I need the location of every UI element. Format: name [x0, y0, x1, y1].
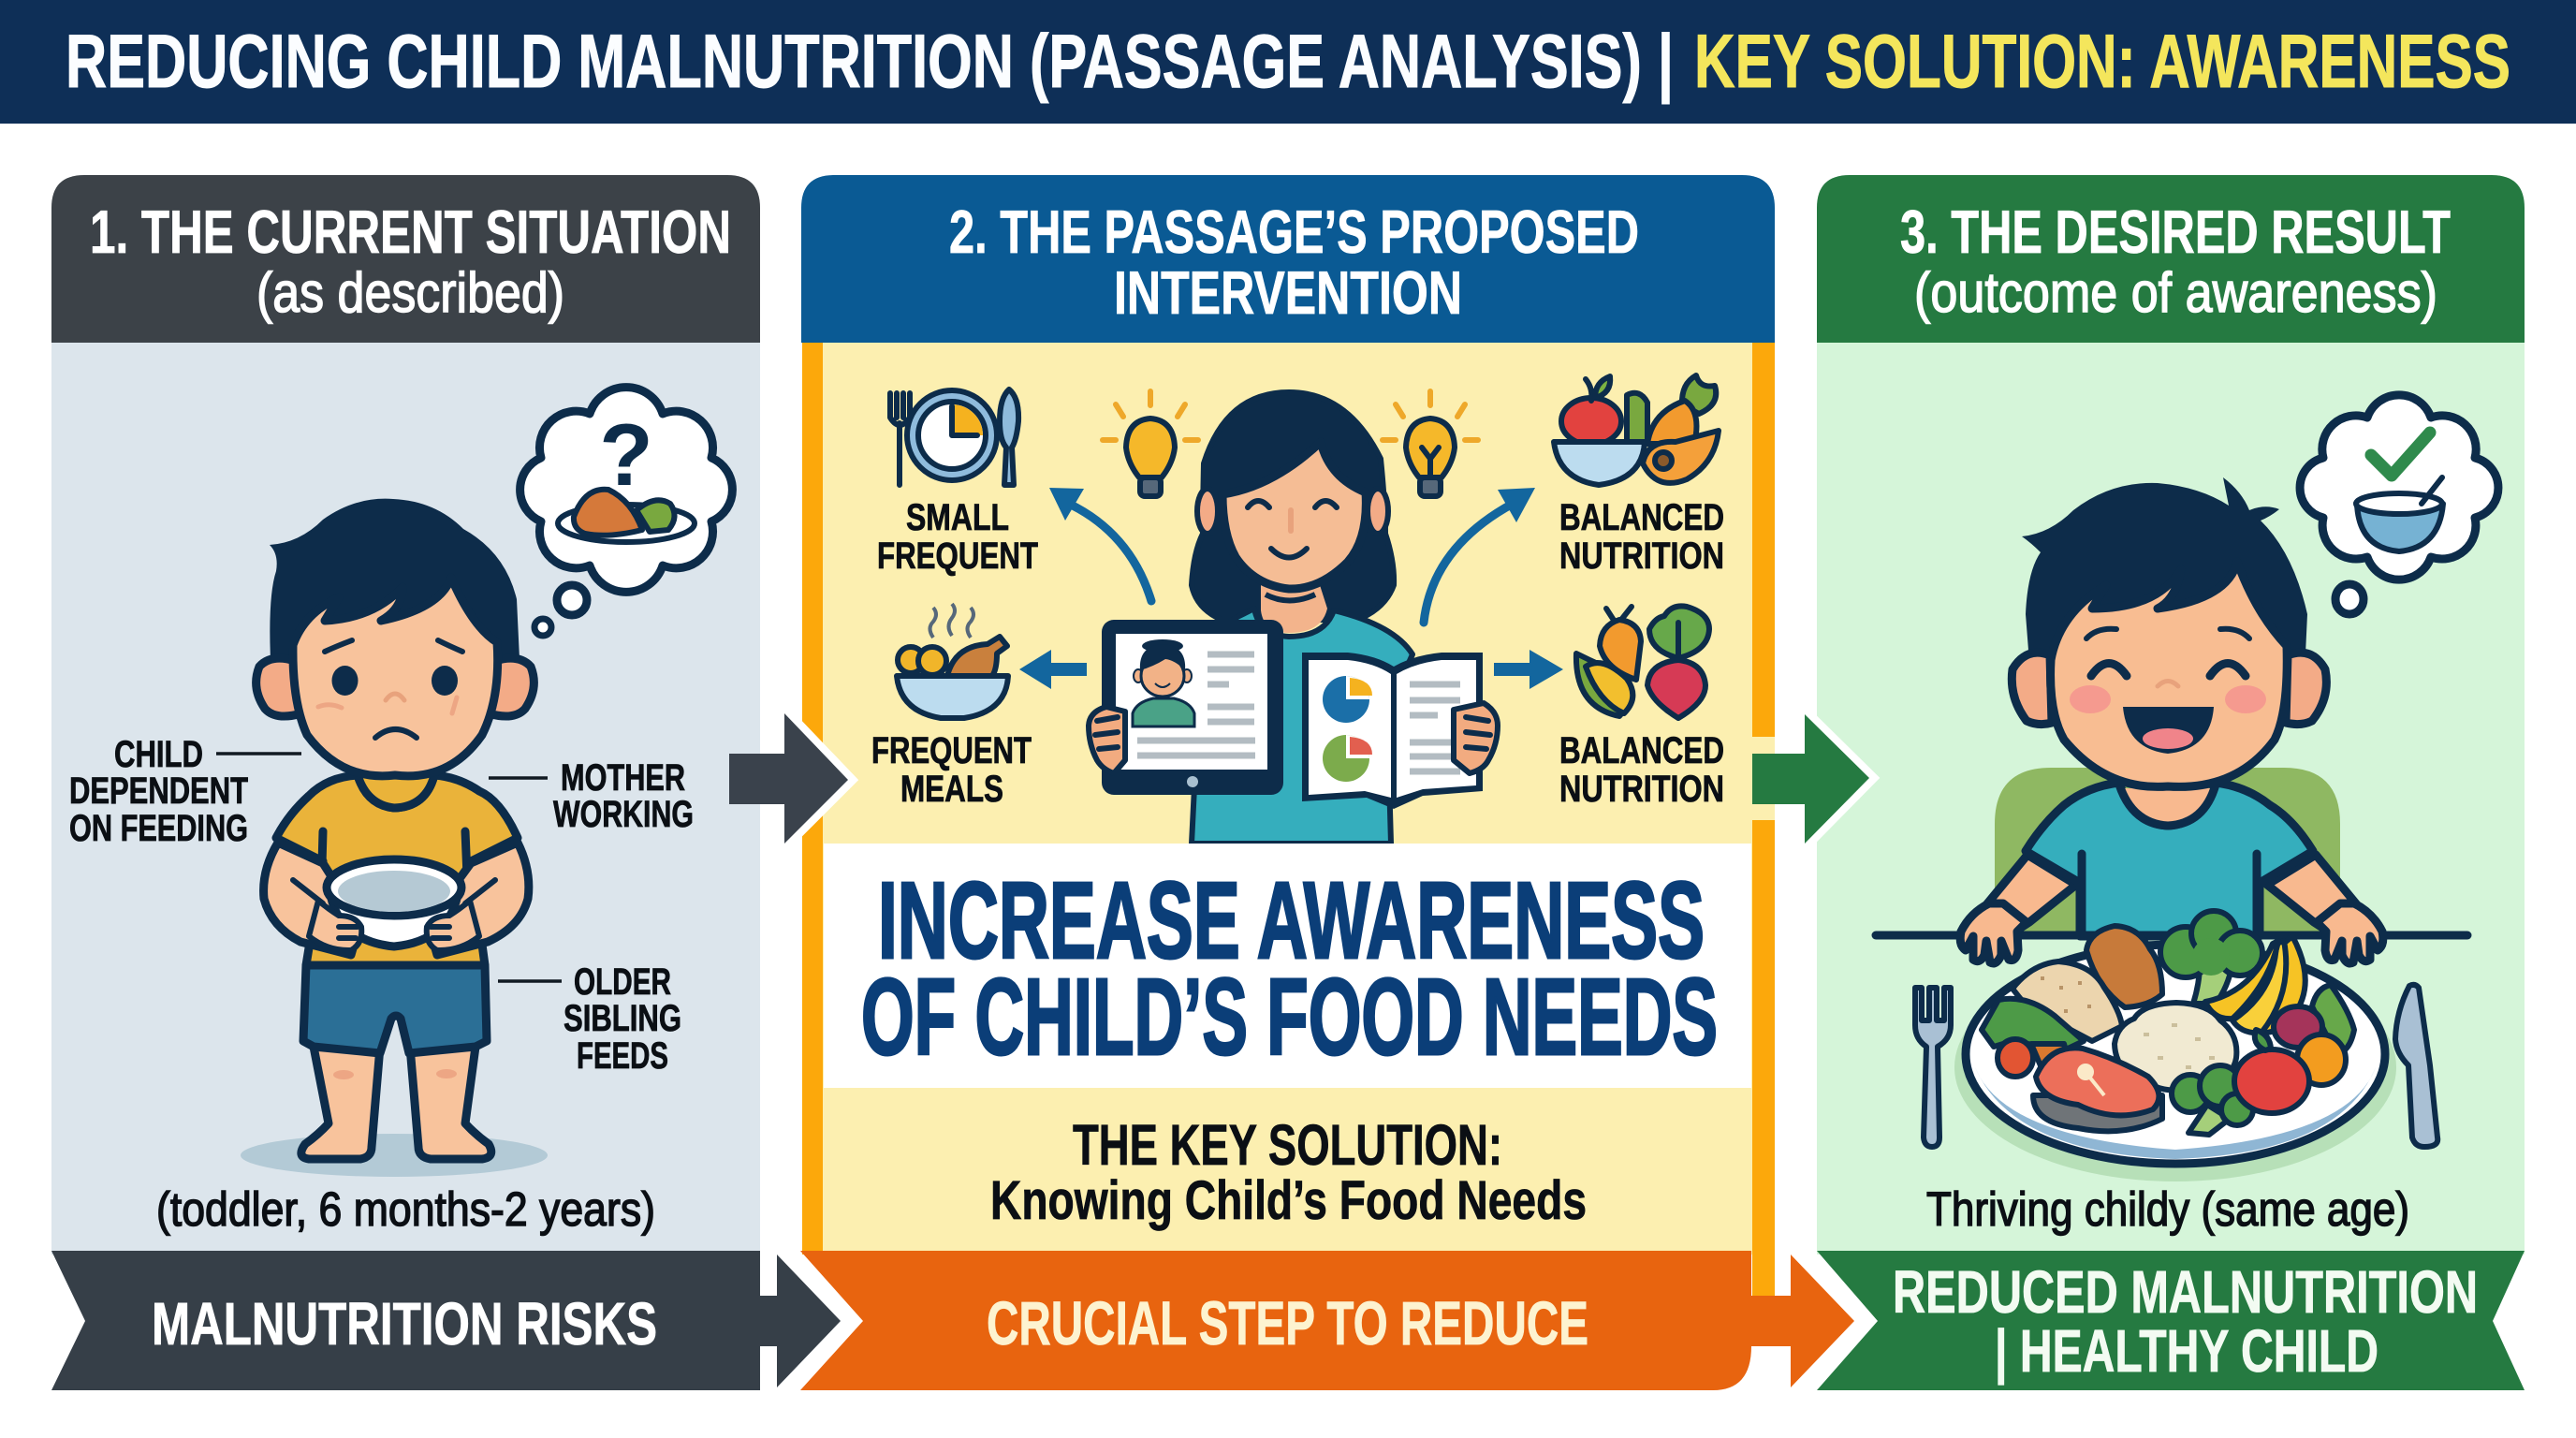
thought bubble: unknown food: [520, 388, 732, 636]
label: child dependent on feeding: [69, 734, 301, 849]
icon: fruit and vegetable bowl: [1554, 375, 1719, 485]
callout: increase awareness: OF CHILD’S FOOD NEEDS: [861, 956, 1718, 1078]
ribbon: reduced malnutrition: [1817, 1251, 2525, 1390]
callout: increase awareness: [824, 844, 1751, 1088]
callout: increase awareness: INCREASE AWARENESS: [878, 859, 1705, 981]
panel 3 heading: [1817, 175, 2525, 343]
label: small frequent: FREQUENT: [877, 536, 1038, 577]
key solution text: Knowing Child’s Food Needs: [990, 1170, 1587, 1231]
label: child dependent on feeding: ON FEEDING: [69, 808, 248, 849]
woman with tablet and book: [1089, 392, 1498, 844]
panel 1 heading: 1. THE CURRENT SITUATION: [90, 198, 731, 266]
panel: desired result: [1817, 175, 2525, 1390]
label: child dependent on feeding: CHILD: [114, 734, 203, 775]
key solution text: THE KEY SOLUTION:: [1073, 1113, 1502, 1177]
icon: frequent meals bowl: [897, 604, 1008, 718]
hand holding tablet: [1089, 707, 1125, 773]
header banner: [0, 0, 2576, 124]
arrow: situation to intervention lower: [760, 1255, 841, 1387]
ribbon: crucial step: CRUCIAL STEP TO REDUCE: [987, 1288, 1588, 1357]
icon: left lightbulb: [1103, 391, 1198, 496]
label: mother working: WORKING: [553, 794, 694, 835]
ribbon: crucial step: [800, 1251, 1854, 1390]
label: small frequent: [877, 497, 1038, 577]
ribbon: malnutrition risks: [51, 1251, 760, 1390]
key solution text: [990, 1113, 1587, 1231]
panel 1 heading: [51, 175, 760, 343]
label: older sibling feeds: FEEDS: [577, 1035, 668, 1077]
orange: [2297, 1034, 2346, 1085]
panel 2 heading: INTERVENTION: [1114, 258, 1462, 327]
grilled potato: [2086, 926, 2162, 1007]
child: undernourished toddler: [241, 499, 548, 1177]
label: small frequent: SMALL: [906, 497, 1009, 538]
knife: [2395, 985, 2437, 1147]
label: child dependent on feeding: DEPENDENT: [69, 770, 248, 812]
label: balanced nutrition lower: NUTRITION: [1559, 769, 1724, 810]
label: older sibling feeds: [498, 961, 681, 1077]
icon: right lightbulb: [1383, 391, 1478, 496]
panel 1 heading: (as described): [256, 261, 564, 324]
caption: toddler age: (toddler, 6 months-2 years): [156, 1182, 655, 1236]
left hand on table: [1960, 903, 2027, 963]
arrow: situation to intervention upper: [729, 713, 848, 844]
bananas: [2205, 936, 2305, 1033]
label: frequent meals: FREQUENT: [871, 730, 1032, 771]
label: mother working: MOTHER: [561, 757, 685, 799]
label: older sibling feeds: SIBLING: [564, 998, 681, 1039]
ribbon: reduced malnutrition: | HEALTHY CHILD: [1995, 1317, 2378, 1386]
label: frequent meals: MEALS: [900, 769, 1003, 810]
salmon steak: [2033, 1048, 2162, 1131]
panel: current situation: [51, 175, 760, 1390]
caption: thriving child: Thriving childy (same age): [1926, 1182, 2409, 1236]
second broccoli: [2172, 1065, 2253, 1135]
greens and tomato: [1982, 999, 2084, 1050]
hand holding book: [1454, 703, 1498, 773]
healthy meal plate: [1954, 911, 2396, 1181]
leaves right: [2312, 985, 2354, 1053]
label: older sibling feeds: OLDER: [574, 961, 671, 1003]
arrow: intervention to result upper: [1752, 714, 1869, 844]
panel 3 heading: (outcome of awareness): [1914, 261, 2437, 324]
thought bubble: healthy bowl: [2300, 395, 2498, 614]
plum: [2274, 1006, 2322, 1048]
rice mound: [2115, 1003, 2236, 1091]
arrow: to balanced nutrition: [1424, 488, 1535, 623]
label: balanced nutrition lower: BALANCED: [1559, 730, 1724, 771]
apple: [2234, 1049, 2309, 1113]
label: balanced nutrition upper: BALANCED: [1559, 497, 1724, 538]
icon: small frequent plate and clock: [890, 389, 1018, 485]
label: mother working: [489, 757, 694, 835]
broccoli: [2160, 911, 2262, 1004]
thought bubble: unknown food: ?: [599, 405, 653, 504]
title: REDUCING CHILD MALNUTRITION (PASSAGE ANALYSIS) |: [66, 20, 1674, 105]
arrow: to small frequent: [1049, 488, 1151, 601]
label: balanced nutrition lower: [1559, 730, 1724, 810]
child: thriving toddler: [1980, 477, 2364, 936]
fork: [1915, 988, 1951, 1147]
icon: vegetables: [1576, 606, 1709, 718]
arrow: to balanced nutrition lower: [1494, 650, 1563, 689]
open book: [1302, 653, 1483, 809]
ribbon: malnutrition risks: MALNUTRITION RISKS: [152, 1290, 657, 1357]
table edge: [1876, 931, 2467, 940]
label: frequent meals: [871, 730, 1032, 810]
tablet: [1102, 620, 1283, 795]
label: balanced nutrition upper: NUTRITION: [1559, 536, 1724, 577]
label: balanced nutrition upper: [1559, 497, 1724, 577]
right hand on table: [2317, 903, 2383, 963]
panel: proposed intervention: [800, 175, 1854, 1390]
arrow: to frequent meals: [1019, 650, 1087, 689]
panel 2 heading: 2. THE PASSAGE’S PROPOSED: [949, 198, 1639, 266]
bread: [2012, 961, 2122, 1041]
panel 2 heading: [801, 175, 1775, 343]
